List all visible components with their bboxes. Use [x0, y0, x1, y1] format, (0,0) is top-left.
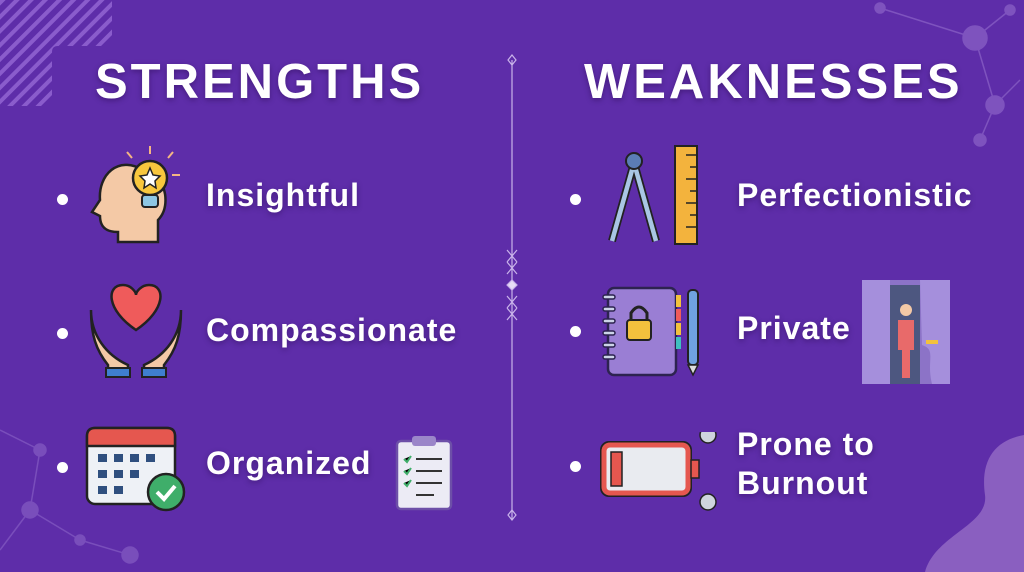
label	[736, 426, 875, 501]
label: Compassionate	[206, 312, 457, 348]
label: Perfectionistic	[737, 177, 973, 213]
label: Organized	[206, 445, 371, 481]
item: prone to burnout	[570, 426, 875, 511]
icon: head with lightbulb	[90, 146, 180, 244]
decoration: blob bottom right	[925, 435, 1024, 572]
icon: clipboard	[396, 436, 452, 510]
icon: compass and ruler	[608, 145, 698, 245]
item: insightful	[57, 146, 360, 244]
item: organized	[57, 426, 452, 512]
decoration: network top right	[874, 2, 1020, 147]
label: Prone to	[737, 426, 875, 462]
item: perfectionistic	[570, 145, 973, 245]
icon: locked journal with pen	[602, 286, 700, 376]
icon: calendar with check	[86, 426, 186, 512]
decoration: striped corner	[0, 0, 112, 106]
decoration: network bottom left	[0, 430, 139, 564]
icon: person behind curtain	[862, 280, 950, 384]
label: Burnout	[737, 465, 868, 501]
item: private	[570, 280, 950, 384]
divider	[506, 54, 518, 521]
label: Insightful	[206, 177, 360, 213]
label: Private	[737, 310, 851, 346]
title: strengths: STRENGTHS	[95, 55, 424, 109]
title: weaknesses: WEAKNESSES	[584, 55, 963, 109]
icon: low battery	[600, 432, 717, 511]
icon: hands with heart	[90, 284, 182, 378]
item: compassionate	[57, 284, 457, 378]
